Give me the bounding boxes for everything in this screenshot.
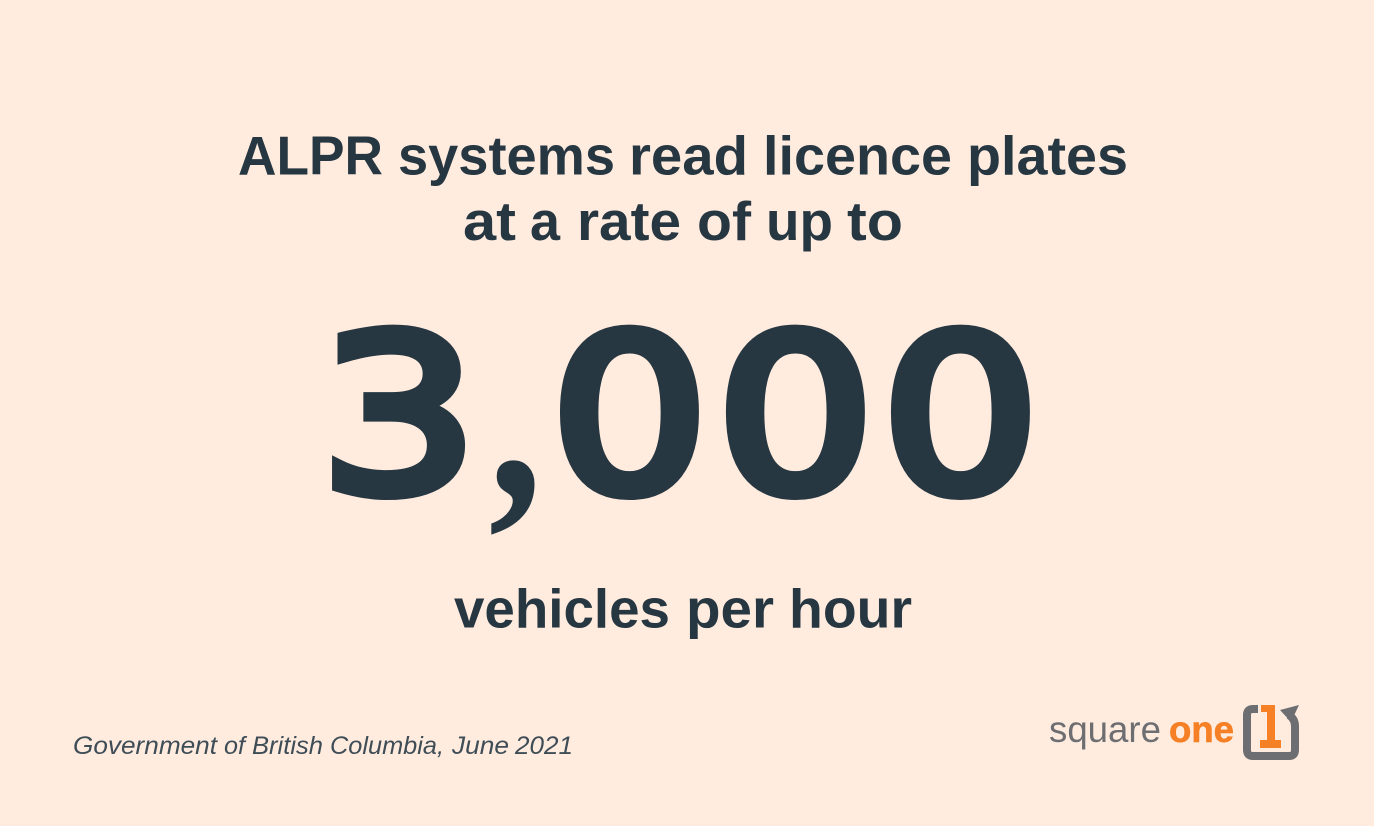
heading line 1: read	[629, 124, 748, 186]
logo wordmark: one: one	[1169, 709, 1234, 750]
source citation: Columbia,	[330, 732, 444, 760]
unit label: vehicles	[454, 578, 670, 640]
unit label: hour	[789, 578, 912, 640]
source citation: Government	[73, 732, 218, 760]
logo: square one	[1049, 705, 1299, 756]
source citation: of	[224, 732, 248, 760]
heading line 2: rate	[577, 190, 681, 252]
unit label: per	[686, 578, 774, 640]
logo icon: bracket with arrow	[1247, 705, 1299, 756]
heading line 2: a	[530, 190, 560, 252]
heading line 2: up	[766, 190, 833, 252]
heading line 2: of	[697, 190, 752, 252]
big number: 3	[320, 291, 478, 542]
logo wordmark: square: square	[1049, 709, 1161, 750]
heading line 1: plates	[967, 124, 1128, 186]
source citation: June	[451, 732, 509, 760]
big number	[320, 278, 1040, 551]
big number: 000	[551, 291, 1040, 542]
heading line 1: licence	[763, 124, 952, 186]
source citation: 2021	[514, 732, 573, 760]
heading line 1: systems	[398, 124, 615, 186]
heading line 2: at	[463, 190, 516, 252]
heading line 2: to	[847, 190, 903, 252]
source citation: British	[252, 732, 323, 760]
big number: ,	[488, 278, 543, 551]
heading line 1: ALPR	[238, 124, 383, 186]
